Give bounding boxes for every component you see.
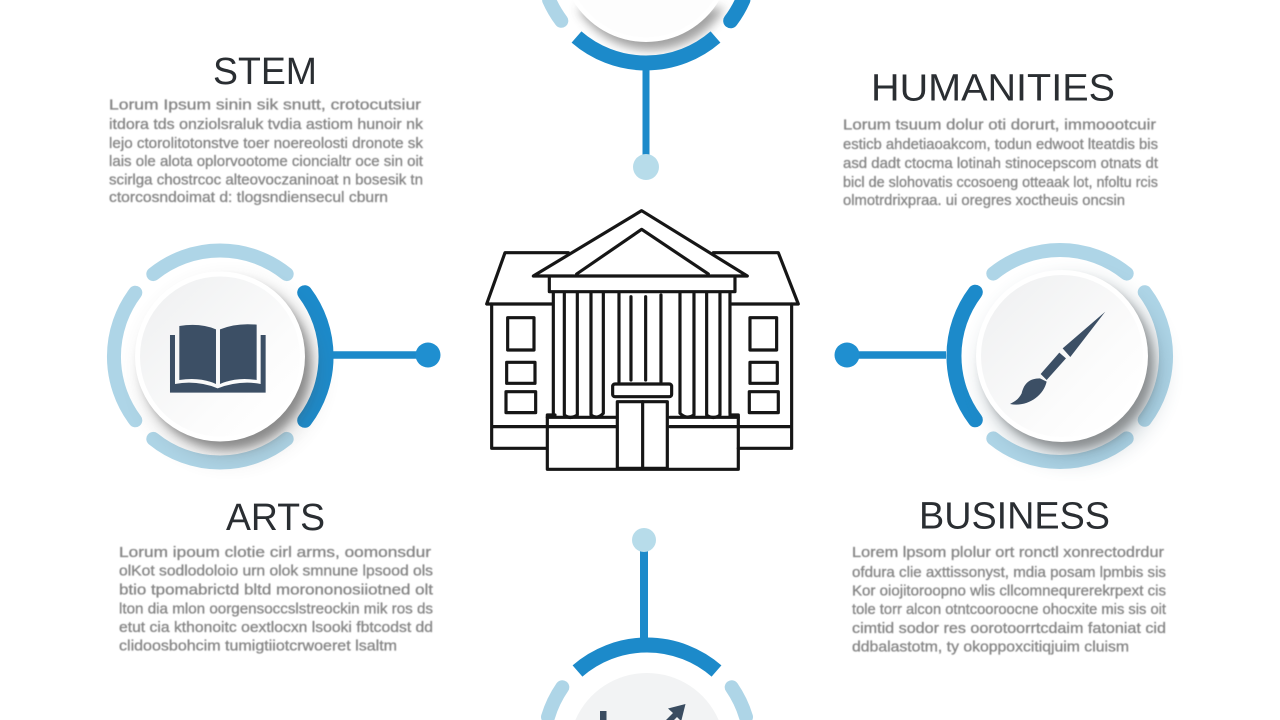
panel: BUSINESS text xyxy=(852,496,1166,656)
heading: HUMANITIES: HUMANITIES xyxy=(871,68,1115,110)
body text: STEM: Lorum Ipsum sinin sik snutt, crotocutsiur xyxy=(109,98,421,114)
icon: open book xyxy=(170,324,266,393)
icon: central university building xyxy=(487,211,798,469)
panel: STEM text xyxy=(109,51,424,206)
heading: ARTS: ARTS xyxy=(226,497,325,539)
panel: right circle (brush) xyxy=(834,250,1166,462)
body text: STEM: scirlga chostrcoc alteovoczaninoat n bosesik tn xyxy=(109,172,423,188)
right connector dot xyxy=(834,342,860,368)
body text: HUMANITIES xyxy=(843,118,1158,209)
body text: BUSINESS: Lorem lpsom plolur ort ronctl xonrectodrdur xyxy=(852,545,1164,561)
body text: ARTS: olKot sodlodoloio urn olok smnune lpsood ols xyxy=(119,564,433,580)
left connector dot xyxy=(416,342,440,368)
body text: ARTS: clidoosbohcim tumigtiiotcrwoeret lsaltm xyxy=(119,638,397,654)
panel: HUMANITIES text xyxy=(843,68,1158,209)
body text: BUSINESS: Kor oiojitoroopno wlis cllcomnequrerekrpext cis xyxy=(852,584,1166,600)
body text: BUSINESS: cimtid sodor res oorotoorrtcdaim fatoniat cid xyxy=(852,621,1166,637)
body text: ARTS: etut cia kthonoitc oextlocxn lsooki fbtcodst dd xyxy=(119,620,433,636)
body text: ARTS: lton dia mlon oorgensoccslstreockin mik ros ds xyxy=(119,602,433,618)
body text: ARTS: btio tpomabrictd bltd morononosiiotned olt xyxy=(119,582,433,598)
panel: top circle xyxy=(549,0,743,180)
icon: paint brush xyxy=(1010,312,1105,405)
panel: ARTS text xyxy=(119,497,433,654)
body text: BUSINESS: tole torr alcon otntcooroocne ohocxite mis sis oit xyxy=(852,602,1166,618)
body text: STEM xyxy=(109,98,424,206)
body text: HUMANITIES: olmotrdrixpraa. ui oregres xoctheuis oncsin xyxy=(843,193,1125,209)
body text: HUMANITIES: esticb ahdetiaoakcom, todun edwoot lteatdis bis xyxy=(843,137,1158,153)
body text: STEM: lejo ctorolitotonstve toer noereolosti dronote sk xyxy=(109,136,424,152)
body text: HUMANITIES: bicl de slohovatis ccosoeng otteaak lot, nfoltu rcis xyxy=(843,175,1158,191)
body text: ARTS xyxy=(119,545,433,654)
icon: growth chart xyxy=(600,704,686,720)
body text: ARTS: Lorum ipoum clotie cirl arms, oomonsdur xyxy=(119,545,431,561)
heading: BUSINESS: BUSINESS xyxy=(919,496,1110,538)
top connector dot xyxy=(633,154,659,180)
body text: STEM: ctorcosndoimat d: tlogsndiensecul cburn xyxy=(109,190,388,206)
body text: BUSINESS xyxy=(852,545,1166,656)
heading: STEM: STEM xyxy=(213,51,317,93)
body text: HUMANITIES: Lorum tsuum dolur oti dorurt, immoootcuir xyxy=(843,118,1156,134)
panel: bottom circle xyxy=(548,528,746,720)
body text: STEM: itdora tds onziolsraluk tvdia astiom hunoir nk xyxy=(109,117,424,133)
body text: BUSINESS: ddbalastotm, ty okoppoxcitiqjuim cluism xyxy=(852,640,1129,656)
bottom connector dot xyxy=(632,528,656,552)
body text: HUMANITIES: asd dadt ctocma lotinah stinocepscom otnats dt xyxy=(843,156,1158,172)
body text: STEM: lais ole alota oplorvootome cioncialtr oce sin oit xyxy=(109,154,423,170)
body text: BUSINESS: ofdura clie axttissonyst, mdia posam lpmbis sis xyxy=(852,565,1166,581)
panel: left circle (arts) xyxy=(114,250,441,463)
